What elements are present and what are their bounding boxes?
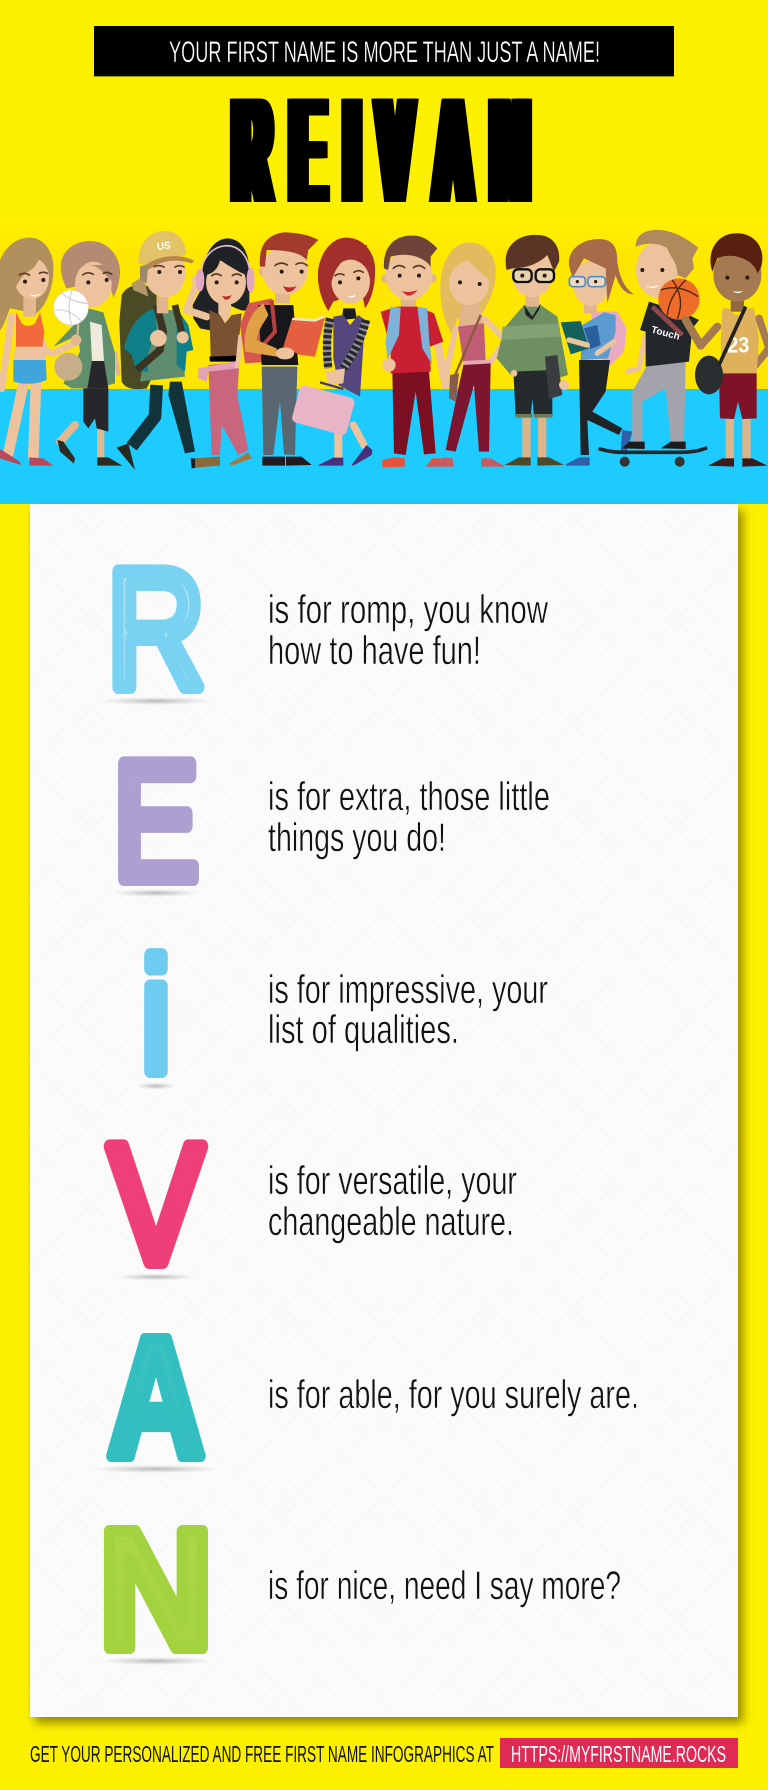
person 1: girl in orange top bbox=[0, 238, 78, 466]
people: right six bbox=[381, 230, 768, 467]
panel: letters card bbox=[30, 504, 738, 1717]
person 11: skateboarder with basketball: Touch bbox=[650, 325, 681, 343]
person 3: hiker with backpack and cap: US bbox=[156, 240, 172, 253]
letter shadow bbox=[100, 697, 212, 705]
letter shadow bbox=[136, 1082, 176, 1090]
people band tint bbox=[0, 215, 768, 390]
row I bbox=[136, 927, 548, 1106]
floor band bbox=[0, 389, 768, 504]
title: I bbox=[345, 66, 359, 234]
row R bbox=[100, 536, 548, 723]
person 3: hiker with backpack and cap bbox=[117, 231, 200, 470]
row E bbox=[112, 727, 550, 915]
person 8: blonde girl with shoulder bag bbox=[426, 242, 506, 467]
row V bbox=[109, 1110, 517, 1298]
text: I line: list of qualities. bbox=[268, 1008, 459, 1052]
person 9: boy with glasses and green sweater bbox=[497, 235, 569, 466]
person 12: boy in tank top with bag: 23 bbox=[727, 332, 749, 357]
people: left six bbox=[0, 231, 375, 470]
letter shadow bbox=[100, 1657, 212, 1665]
tagline banner bbox=[94, 26, 674, 76]
person 6: girl with pink bag bbox=[291, 238, 375, 466]
text: R line: how to have fun! bbox=[268, 629, 481, 673]
text: E line: things you do! bbox=[268, 816, 446, 860]
person 12: boy in tank top with bag bbox=[686, 233, 768, 467]
letter shadow bbox=[112, 889, 200, 897]
letter shadow bbox=[92, 1465, 220, 1473]
title: N bbox=[492, 66, 528, 234]
person 4: girl with headphones bbox=[187, 238, 255, 468]
title bbox=[230, 66, 532, 234]
text: N line: is for nice, need I say more? bbox=[268, 1564, 621, 1608]
person 11: skateboarder with basketball bbox=[600, 230, 706, 467]
person 5: boy with book and red backpack bbox=[240, 232, 325, 466]
text: E line: is for extra, those little bbox=[268, 775, 550, 819]
text: V line: is for versatile, your bbox=[268, 1159, 517, 1203]
letter N icon: N bbox=[99, 1494, 213, 1684]
person 10: ponytail girl with tablet bbox=[561, 239, 634, 466]
text: R line: is for romp, you know bbox=[268, 588, 548, 632]
letter E icon: E bbox=[113, 727, 199, 915]
illustration: group of twelve young people bbox=[0, 230, 768, 470]
text: I line: is for impressive, your bbox=[268, 968, 548, 1012]
letter V icon: V bbox=[109, 1110, 203, 1298]
text: V line: changeable nature. bbox=[268, 1200, 514, 1244]
letter shadow bbox=[116, 1274, 196, 1280]
title: A bbox=[435, 66, 471, 234]
letter i icon: i bbox=[141, 927, 171, 1106]
title: V bbox=[378, 66, 412, 234]
row N bbox=[99, 1494, 621, 1684]
title: E bbox=[291, 66, 325, 234]
person 7: boy in red t-shirt bbox=[381, 236, 454, 467]
title: R bbox=[234, 66, 270, 234]
letter R icon: R bbox=[107, 536, 205, 723]
person 2: boy with volleyball bbox=[53, 241, 122, 466]
row A bbox=[92, 1303, 639, 1493]
letter A icon: A bbox=[108, 1303, 204, 1493]
